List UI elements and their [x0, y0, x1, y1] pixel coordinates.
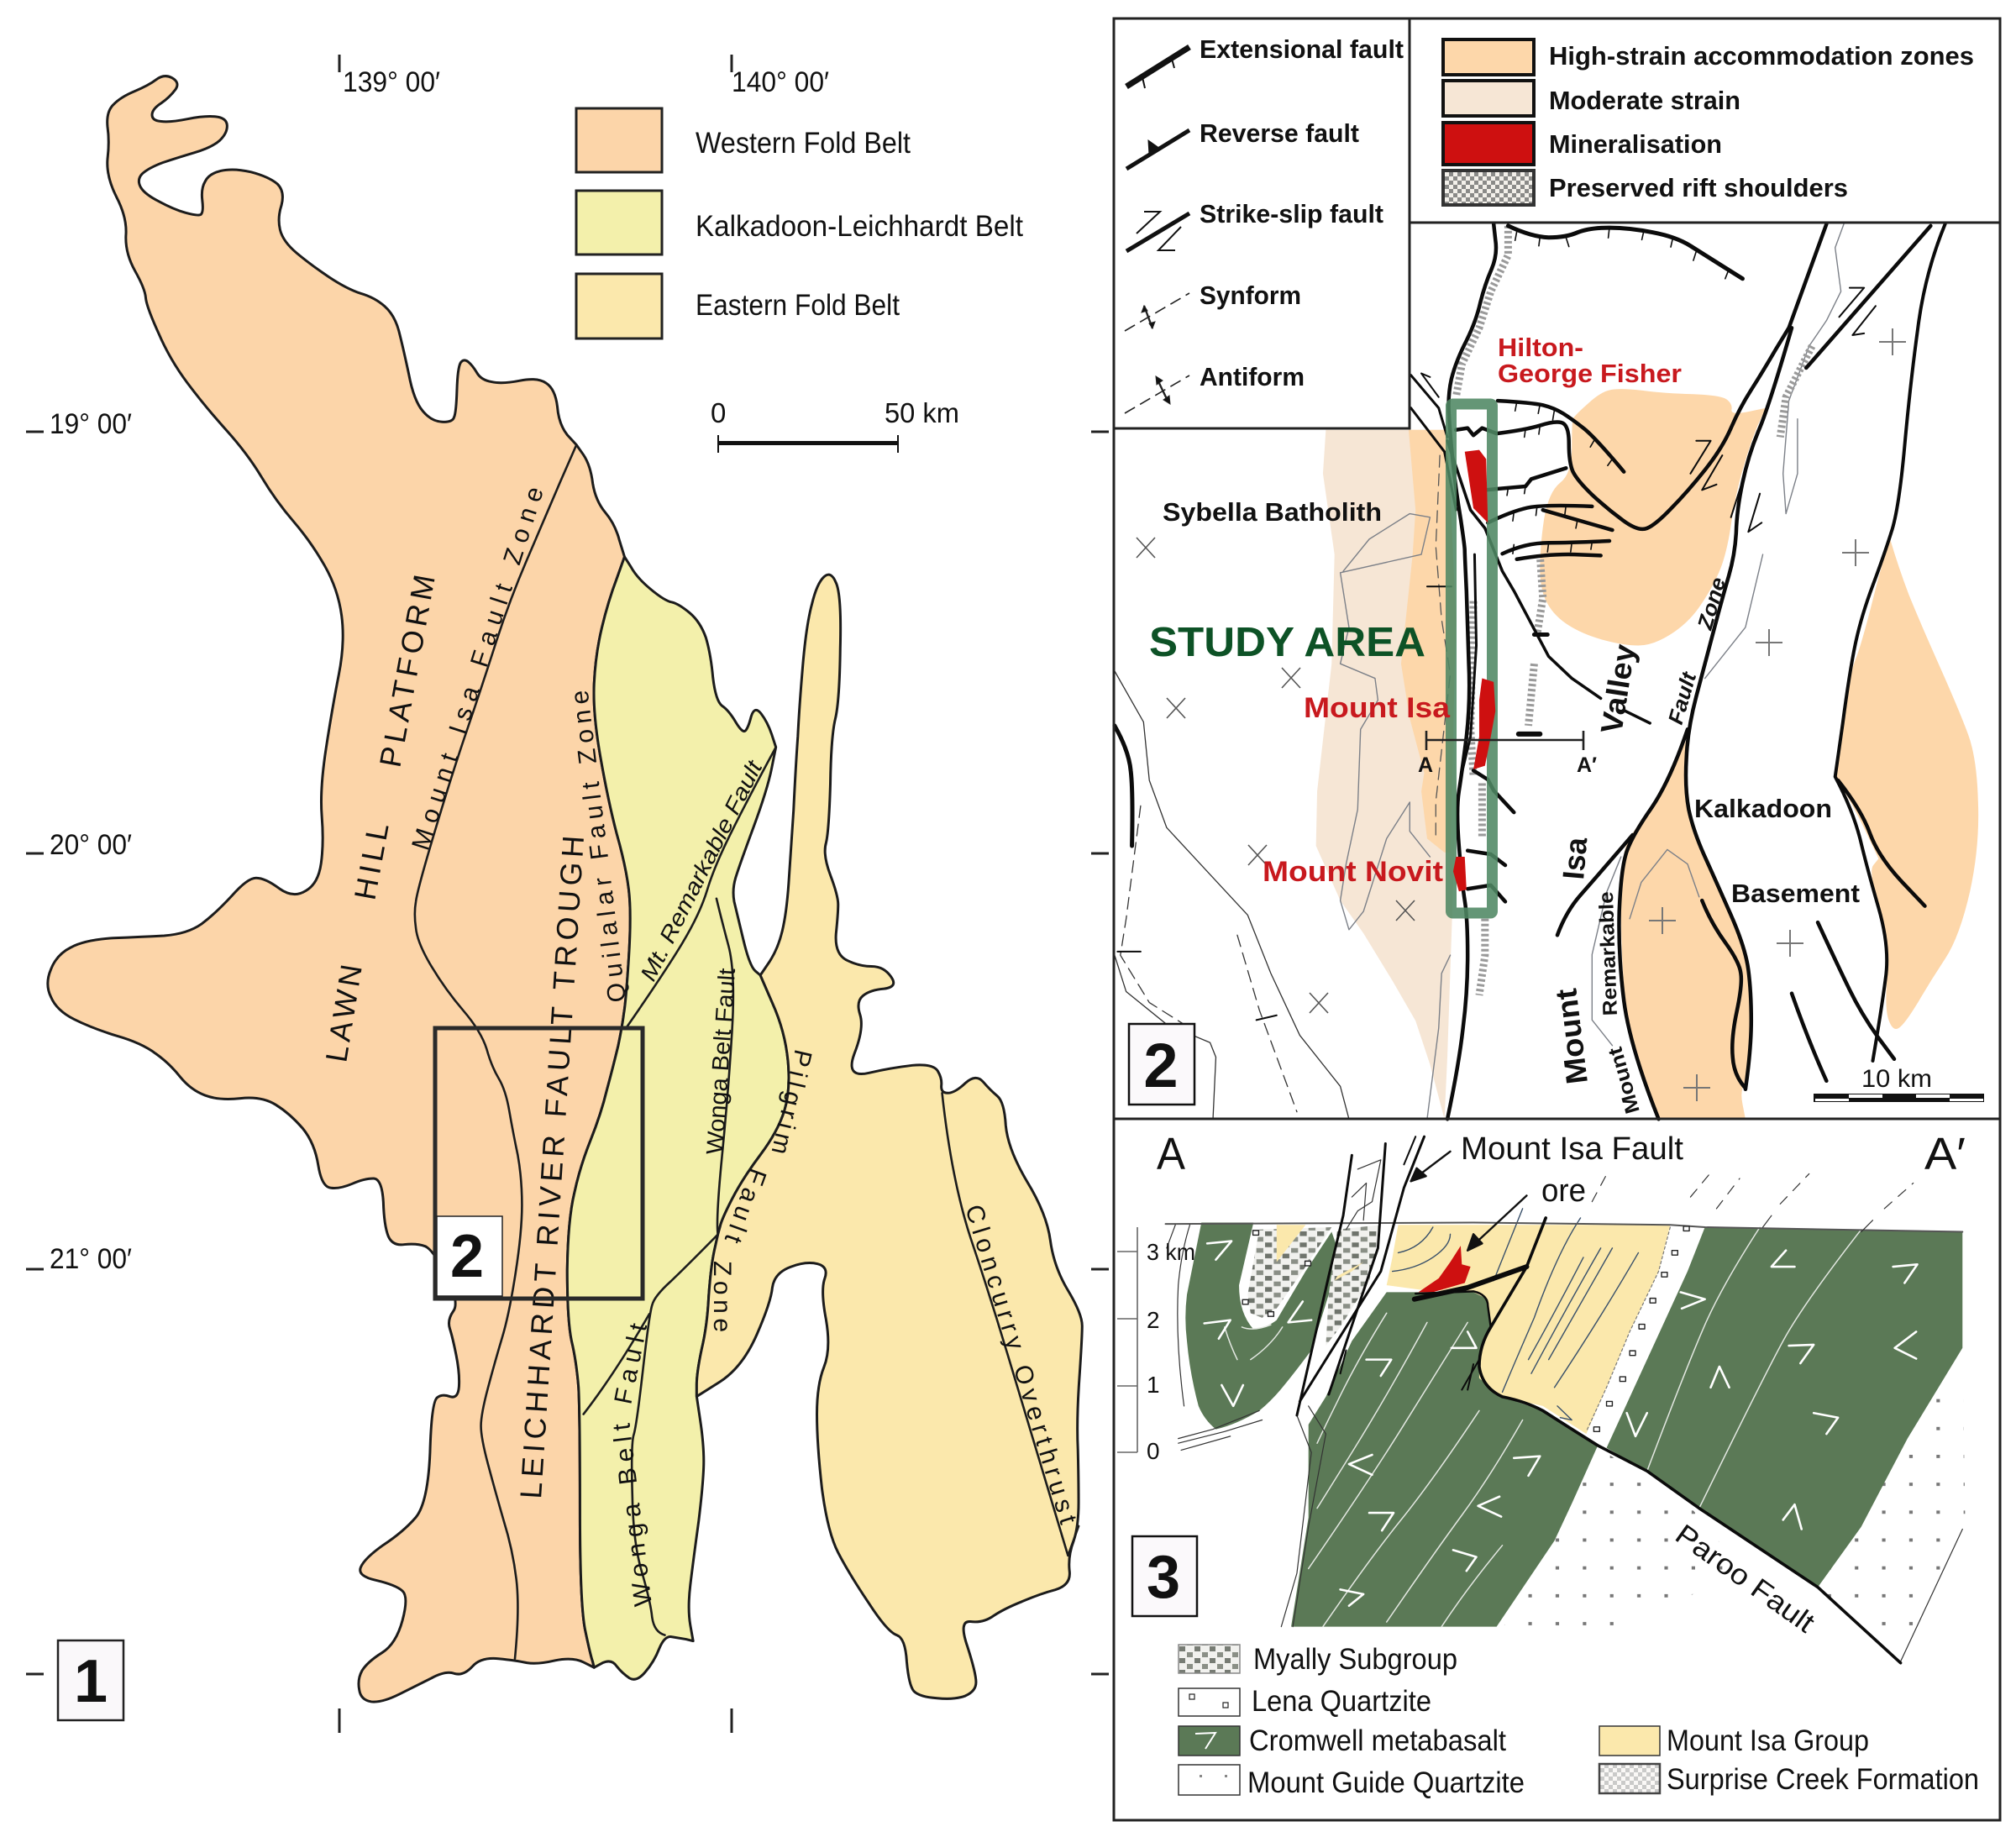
- metabasalt chevrons: [1205, 1241, 1918, 1606]
- symbol: extensional fault: [1126, 47, 1189, 88]
- fault barbs: [1507, 228, 1728, 554]
- text: Myally Subgroup: Myally Subgroup: [1253, 1643, 1457, 1676]
- mineralisation bodies: [1453, 450, 1495, 891]
- label: STUDY AREA: STUDY AREA: [1149, 620, 1425, 665]
- label: Fault lower: Fault: [610, 1320, 653, 1406]
- inset box 2: [435, 1028, 643, 1299]
- text: Mount Guide Quartzite: Mount Guide Quartzite: [1247, 1766, 1525, 1799]
- label: Cloncurry Overthrust: Cloncurry Overthrust: [959, 1201, 1082, 1528]
- panel 2: structural map: [1114, 18, 2000, 1119]
- label: A prime: A′: [1924, 1129, 1966, 1179]
- text: Antiform: Antiform: [1200, 362, 1305, 391]
- text: Lena Quartzite: Lena Quartzite: [1252, 1685, 1431, 1718]
- fold axis symbols: [1117, 586, 1452, 1020]
- zone: high strain west: [1401, 430, 1456, 853]
- zone: high strain centre: [1540, 389, 1766, 646]
- legend text: Eastern Fold Belt: Eastern Fold Belt: [696, 289, 900, 322]
- scale bar 50 km: 0: [711, 397, 726, 428]
- label: ore: ore: [1541, 1173, 1586, 1209]
- scale bar 10 km: 10 km: [1861, 1065, 1932, 1093]
- swatch: mineralisation: [1443, 123, 1534, 165]
- label: Fault: Fault: [719, 1165, 771, 1247]
- unit: Mount Isa Group: [1387, 1225, 1670, 1434]
- swatch: Myally Subgroup: [1179, 1645, 1240, 1673]
- text: Extensional fault: Extensional fault: [1200, 34, 1404, 64]
- text: Reverse fault: Reverse fault: [1200, 118, 1359, 148]
- swatch: rift shoulders: [1443, 171, 1534, 205]
- label: HILL: HILL: [348, 821, 396, 902]
- basement + marks: [1649, 328, 1906, 1101]
- batholith x marks: [1137, 538, 1415, 1013]
- symbol: reverse fault: [1126, 130, 1189, 169]
- legend: cross section units: [1179, 1643, 1979, 1799]
- region: Kalkadoon-Leichhardt Belt: [567, 557, 789, 1679]
- study area green rectangle: [1452, 404, 1492, 913]
- bedding lines in Mount Isa Group: [1393, 1209, 1638, 1420]
- faults: [1297, 1136, 1901, 1663]
- mineralisation: Mount Novit: [1453, 857, 1467, 891]
- outer frame of panels 2 and 3: [1114, 18, 2000, 1820]
- swatch: Kalkadoon-Leichhardt Belt: [576, 191, 662, 255]
- zone: moderate strain: [1316, 430, 1456, 1119]
- text: high strain: High-strain accommodation zones: [1549, 41, 1974, 71]
- unit: Cromwell metabasalt main: [1291, 1292, 1598, 1627]
- swatch: Eastern Fold Belt: [576, 274, 662, 339]
- depth scale: 3 km: [1147, 1239, 1195, 1265]
- label box 2: [437, 1216, 502, 1296]
- text: Surprise Creek Formation: Surprise Creek Formation: [1667, 1763, 1979, 1796]
- unit: Myally Subgroup: [1247, 1227, 1331, 1318]
- label box 2: 2: [450, 1223, 484, 1290]
- legend text: Western Fold Belt: Western Fold Belt: [696, 127, 911, 160]
- depth scale: 2: [1147, 1307, 1160, 1333]
- swatch: Mount Isa Group: [1599, 1726, 1660, 1756]
- arrow: ore: [1467, 1195, 1526, 1251]
- text: Synform: Synform: [1200, 281, 1301, 310]
- label: Wonga Belt lower: Wonga Belt: [607, 1421, 658, 1608]
- map frame ticks: [26, 55, 1109, 1733]
- panel 3: cross section: [1117, 1129, 1979, 1799]
- depth scale: 1: [1147, 1372, 1160, 1398]
- thin geological contours: [1341, 224, 1844, 1119]
- section line A-A': [1418, 731, 1597, 777]
- region: Western Fold Belt: [48, 76, 630, 1702]
- label: Basement: Basement: [1731, 879, 1860, 908]
- label box 2 panel: [1129, 1024, 1194, 1105]
- label: Mount Isa Fault: Mount Isa Fault: [1461, 1131, 1683, 1167]
- swatch: Cromwell metabasalt: [1179, 1726, 1240, 1756]
- panel 1: regional fold belt map: [26, 55, 1109, 1733]
- zone: high strain east lobe: [1835, 539, 1978, 1029]
- label box 3: [1132, 1536, 1197, 1616]
- text: Strike-slip fault: Strike-slip fault: [1200, 199, 1383, 228]
- contours on metabasalt: [1225, 1227, 1861, 1627]
- label: Kalkadoon: Kalkadoon: [1694, 794, 1832, 823]
- label: Mount Isa Fault Zone: Mount Isa Fault Zone: [407, 484, 549, 853]
- depth scale: [1117, 1227, 1195, 1464]
- label box 2 panel: 2: [1143, 1031, 1179, 1100]
- text: Mount Isa Group: Mount Isa Group: [1667, 1724, 1869, 1757]
- arrow: Mount Isa Fault: [1411, 1152, 1451, 1181]
- symbol: antiform: [1125, 375, 1189, 413]
- text: rift shoulders: Preserved rift shoulders: [1549, 173, 1848, 202]
- label: Wonga Belt Fault upper: Wonga Belt Fault: [701, 968, 740, 1155]
- legend: structure symbols: [1114, 18, 1410, 428]
- latitude label 19: 19° 00′: [50, 408, 132, 440]
- text: moderate strain: Moderate strain: [1549, 86, 1740, 115]
- label: Hilton-George Fisher: George Fisher: [1498, 359, 1682, 388]
- legend: fold belts: [576, 108, 1023, 339]
- unit: Cromwell metabasalt east: [1607, 1227, 1962, 1588]
- label box 1: 1: [74, 1648, 108, 1715]
- swatch: Western Fold Belt: [576, 108, 662, 172]
- latitude label 20: 20° 00′: [50, 829, 132, 861]
- label: Hilton-George Fisher: Hilton-: [1498, 333, 1583, 362]
- longitude label 139: 139° 00′: [343, 66, 440, 98]
- label: Sybella Batholith: Sybella Batholith: [1163, 497, 1382, 527]
- label: Zone: Zone: [708, 1261, 736, 1332]
- label: LAWN: LAWN: [318, 962, 369, 1064]
- swatch: moderate strain: [1443, 81, 1534, 116]
- faults: [415, 445, 1079, 1659]
- label: PLATFORM: PLATFORM: [373, 572, 442, 769]
- text: mineralisation: Mineralisation: [1549, 129, 1722, 159]
- symbol: strike-slip fault: [1126, 212, 1189, 251]
- surprise creek dot pattern: [1503, 1348, 1966, 1661]
- label: Pilgrim: Pilgrim: [766, 1047, 816, 1157]
- scale bar 50 km: [711, 397, 959, 453]
- region: Eastern Fold Belt: [696, 575, 1082, 1698]
- depth scale: 0: [1147, 1438, 1160, 1464]
- swatch: Lena Quartzite: [1179, 1688, 1240, 1716]
- legend: strain zones: [1410, 18, 2000, 223]
- legend text: Kalkadoon-Leichhardt Belt: Kalkadoon-Leichhardt Belt: [696, 210, 1023, 243]
- label: Leichhardt River Fault Trough: LEICHHARDT RIVER FAULT TROUGH: [513, 835, 591, 1500]
- ore body: [1419, 1246, 1471, 1292]
- thin structural lines: [1166, 1160, 1962, 1661]
- label box 1: [58, 1640, 123, 1720]
- label: Paroo Fault: Paroo Fault: [1669, 1519, 1821, 1640]
- rift shoulder traces: [1456, 226, 1812, 995]
- label: Mount large: Mount: [1548, 987, 1594, 1086]
- label: Quilalar Fault Zone: Quilalar Fault Zone: [566, 689, 632, 1004]
- swatch: high strain: [1443, 39, 1534, 75]
- text: Cromwell metabasalt: Cromwell metabasalt: [1249, 1724, 1506, 1757]
- section line A-A': A′: [1577, 753, 1597, 777]
- label: Remarkable: Remarkable: [1595, 891, 1622, 1016]
- label: Mount Isa: Mount Isa: [1304, 692, 1451, 724]
- swatch: Mount Guide Quartzite: [1179, 1765, 1240, 1795]
- label: Fault: Fault: [1664, 669, 1702, 727]
- cross section drawing: [1166, 1136, 1966, 1663]
- swatch: Surprise Creek Formation: [1599, 1764, 1660, 1793]
- zone: high strain south lobe: [1621, 737, 1751, 1119]
- label: A: A: [1157, 1129, 1185, 1179]
- map 2 fill zones: [1115, 224, 1978, 1119]
- mineralisation: Hilton: [1465, 450, 1488, 522]
- faults: [1115, 224, 1945, 1119]
- label: Valley: Valley: [1593, 642, 1642, 736]
- label: Hilton-George Fisher: [1498, 333, 1682, 388]
- label: Zone: Zone: [1693, 575, 1730, 633]
- section line A-A': A: [1418, 753, 1433, 777]
- unit: Cromwell metabasalt left syncline: [1185, 1222, 1337, 1430]
- Lena Quartzite squares: [1242, 1226, 1689, 1431]
- label box 3: 3: [1147, 1544, 1180, 1611]
- scale bar 10 km: [1814, 1065, 1984, 1102]
- symbol: synform: [1125, 293, 1189, 331]
- label: Isa: Isa: [1556, 835, 1593, 881]
- label: Mt. Remarkable Fault: Mt. Remarkable Fault: [636, 756, 768, 985]
- map: fold belts: [48, 76, 1082, 1702]
- label: Mount small: Mount: [1604, 1044, 1645, 1116]
- strike-slip half arrows: [1421, 288, 1876, 532]
- scale bar 50 km: 50 km: [885, 397, 959, 428]
- mineralisation: Mount Isa: [1473, 679, 1495, 769]
- latitude label 21: 21° 00′: [50, 1243, 132, 1275]
- longitude label 140: 140° 00′: [732, 66, 829, 98]
- label: Mount Novit: Mount Novit: [1263, 856, 1443, 888]
